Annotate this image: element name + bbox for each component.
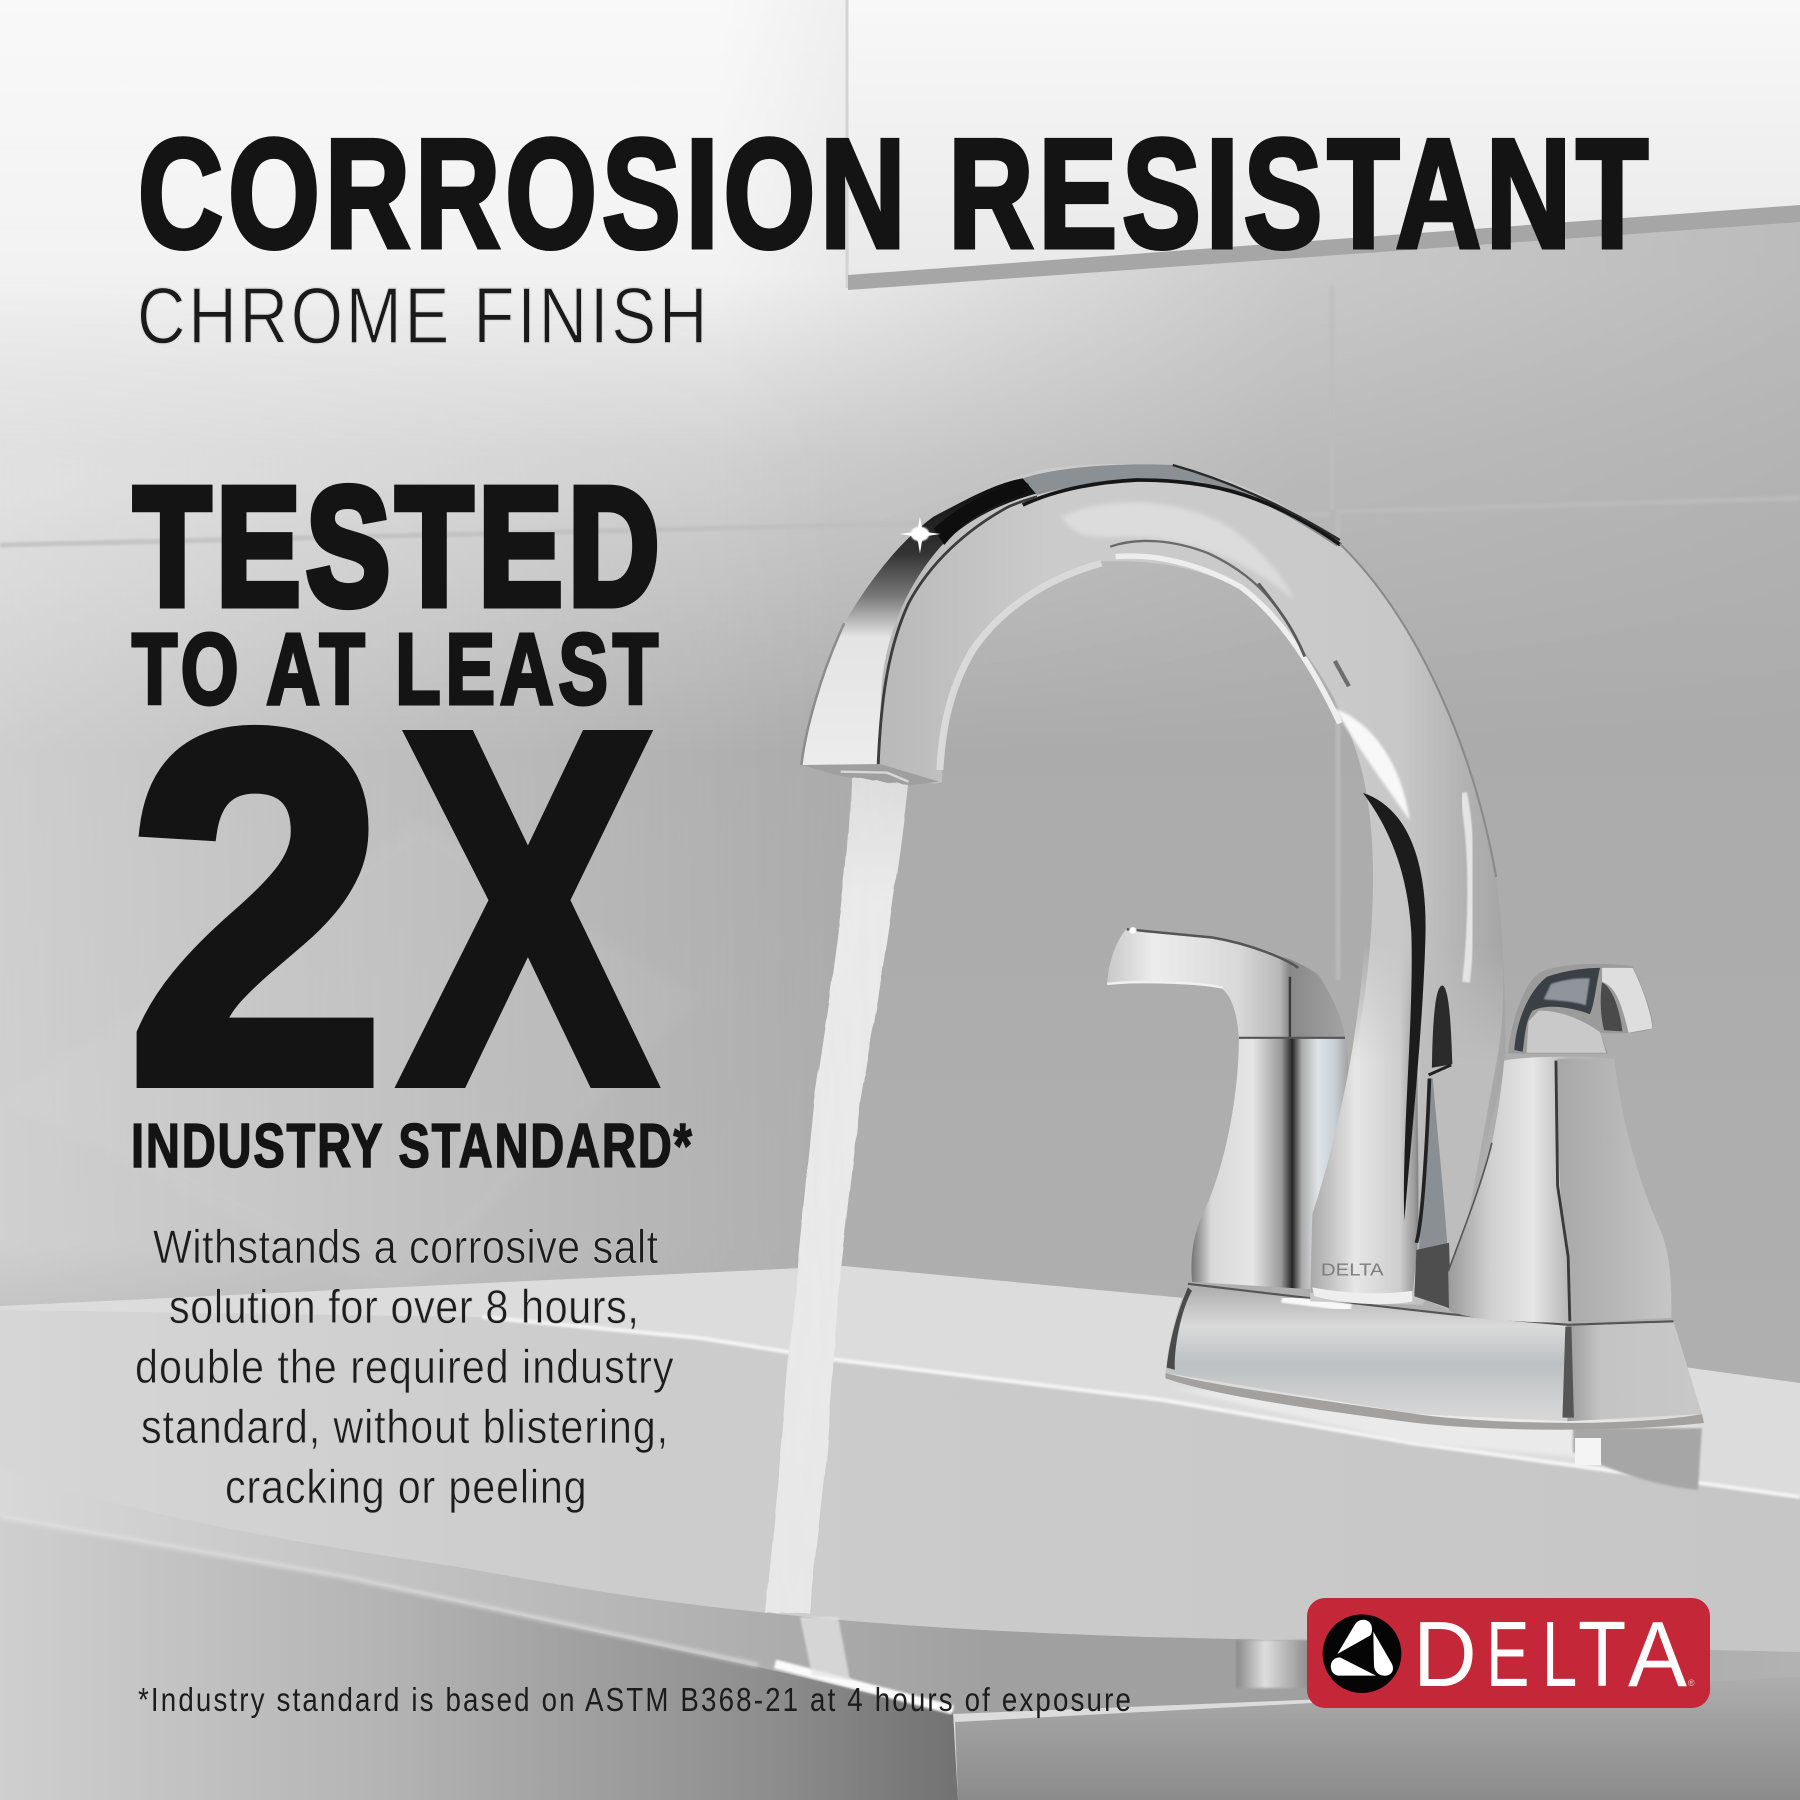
faucet: spout and body <box>802 464 1505 1305</box>
logo wordmark: A <box>1628 1603 1687 1707</box>
logo icon: triangle petals <box>1323 1614 1401 1693</box>
title: CORROSION RESISTANT <box>138 107 1648 281</box>
description text: cracking or peeling <box>225 1462 587 1514</box>
description text: Withstands a corrosive salt <box>153 1222 658 1274</box>
logo wordmark: T <box>1578 1603 1626 1706</box>
logo wordmark: L <box>1542 1602 1577 1706</box>
stat: 2X: 2 <box>127 629 386 1188</box>
faucet <box>801 464 1704 1430</box>
water stream <box>765 777 908 1680</box>
faucet: left lever handle <box>1107 927 1345 1038</box>
description text: solution for over 8 hours, <box>169 1282 639 1334</box>
registered mark: ® <box>1688 1678 1695 1688</box>
Delta logo badge <box>1307 1598 1710 1708</box>
description text: standard, without blistering, <box>141 1402 668 1454</box>
footnote: *Industry standard is based on ASTM B368-21 at 4 hours of exposure <box>138 1682 1131 1719</box>
stat: 2X <box>127 629 656 1188</box>
faucet: small brand mark: DELTA <box>1321 1261 1384 1280</box>
stat: to at least: TO AT LEAST <box>132 613 658 725</box>
description text <box>135 1222 674 1514</box>
logo wordmark <box>1413 1602 1687 1707</box>
background: faucet reflection on deck <box>1171 1388 1702 1490</box>
faucet: right handle body <box>1448 1057 1671 1323</box>
faucet: deck base plate <box>1165 1284 1704 1430</box>
faucet: spout reflections <box>801 464 1340 785</box>
description text: double the required industry <box>135 1342 674 1394</box>
stat: industry standard: INDUSTRY STANDARD* <box>131 1111 692 1181</box>
background: sink basin <box>0 1266 1800 1800</box>
faucet: body highlights <box>1335 544 1496 1221</box>
faucet: left handle stem <box>1191 1037 1348 1289</box>
background: bathroom wall <box>0 0 1800 1306</box>
logo wordmark: E <box>1486 1603 1529 1707</box>
faucet: right lever <box>1508 964 1653 1054</box>
subtitle: CHROME FINISH <box>137 270 707 360</box>
background: wall cabinet <box>847 0 1800 290</box>
stat: 2X: X <box>401 629 656 1188</box>
logo wordmark: D <box>1413 1603 1477 1707</box>
faucet: sparkle <box>900 517 941 553</box>
stat: tested: TESTED <box>134 454 659 640</box>
faucet: lower body <box>1310 963 1503 1310</box>
